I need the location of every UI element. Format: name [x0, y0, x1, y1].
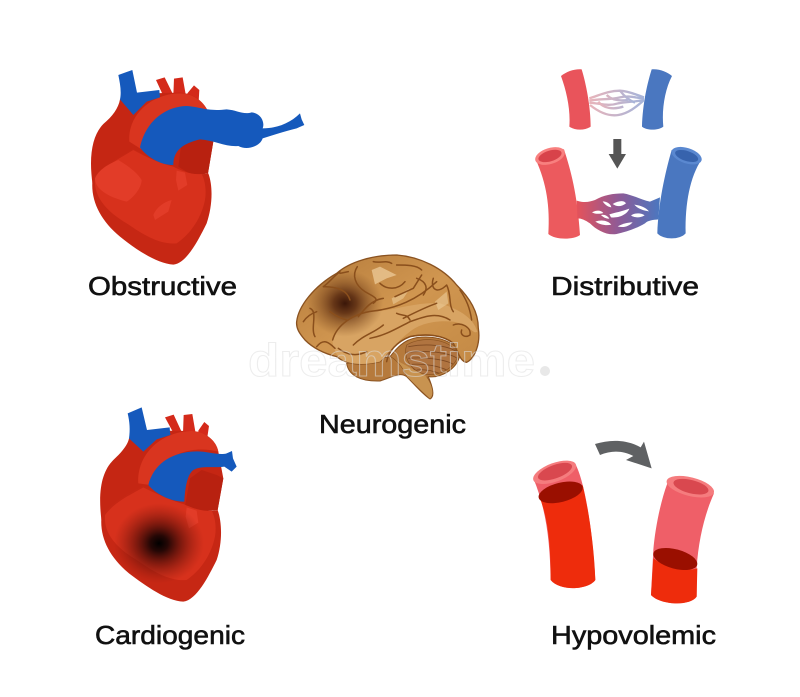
watermark: dreamstime — [248, 334, 535, 386]
large capillary network — [577, 193, 660, 234]
icon: distributive blood vessels — [533, 69, 704, 239]
full vessel — [533, 463, 595, 588]
icon: hypovolemic vessels — [530, 441, 716, 603]
brain stem and cerebellum — [347, 337, 460, 399]
depleted vessel — [651, 483, 714, 603]
label: Cardiogenic: Cardiogenic — [95, 620, 245, 650]
large artery — [536, 149, 580, 239]
small capillaries — [589, 91, 644, 115]
icon: cardiogenic heart — [100, 407, 237, 602]
arrow: down — [609, 139, 626, 169]
arrow: curved — [595, 441, 652, 468]
cerebrum — [297, 255, 479, 364]
label: Hypovolemic: Hypovolemic — [551, 620, 716, 650]
icon: brain — [297, 255, 479, 399]
small artery — [561, 69, 591, 130]
infarct dark spot — [114, 503, 204, 583]
vena cava — [128, 407, 170, 452]
label: Distributive: Distributive — [551, 271, 699, 301]
label: Neurogenic: Neurogenic — [319, 409, 466, 439]
infarct dark spot — [310, 274, 380, 334]
temporal lobe — [332, 303, 477, 364]
small vein — [642, 69, 672, 130]
label: Obstructive: Obstructive — [88, 271, 237, 301]
icon: obstructive heart — [91, 70, 304, 265]
large vein — [657, 149, 702, 238]
sulci — [303, 262, 472, 362]
highlights — [372, 267, 448, 310]
